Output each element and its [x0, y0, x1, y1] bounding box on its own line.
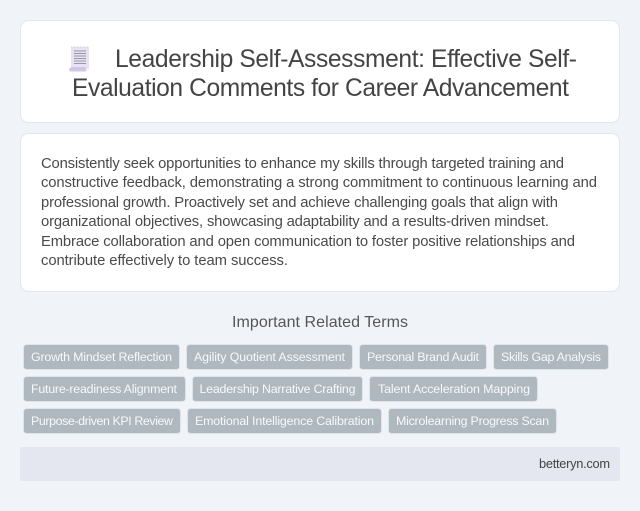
footer: betteryn.com	[539, 456, 610, 471]
panel: related terms chips	[24, 344, 608, 434]
chip: growth mindset	[24, 344, 180, 370]
chip: microlearning	[388, 408, 556, 434]
chip: personal brand: Personal Brand Audit	[367, 350, 480, 364]
chip: agility quotient	[186, 344, 352, 370]
panel: summary card	[20, 134, 620, 292]
summary text: organizational objectives, showcasing adaptability and a results-driven mindset.	[41, 214, 549, 230]
chip: personal brand	[360, 344, 486, 370]
summary text: constructive feedback, demonstrating a strong commitment to continuous learning and	[41, 175, 597, 191]
chip: leadership narrative: Leadership Narrative Crafting	[200, 382, 356, 396]
chip: emotional intelligence	[188, 408, 382, 434]
chip: purpose-driven: Purpose-driven KPI Review	[31, 414, 173, 428]
summary text	[41, 156, 597, 269]
chip: future-readiness	[24, 376, 186, 402]
chip: leadership narrative	[192, 376, 362, 402]
chip: skills gap: Skills Gap Analysis	[501, 350, 601, 364]
title text: Leadership Self-Assessment: Effective Self-	[115, 46, 577, 73]
footer	[20, 447, 620, 481]
summary text: Embrace collaboration and open communication to foster positive relationships and	[41, 234, 575, 250]
chip: purpose-driven	[24, 408, 180, 434]
chip: skills gap	[494, 344, 608, 370]
panel: title card	[20, 20, 620, 122]
chip: microlearning: Microlearning Progress Scan	[396, 414, 549, 428]
heading: related terms: Important Related Terms	[232, 314, 408, 331]
chip: growth mindset: Growth Mindset Reflection	[31, 350, 172, 364]
chip: emotional intelligence: Emotional Intelligence Calibration	[195, 414, 374, 428]
chip: talent acceleration: Talent Acceleration Mapping	[378, 382, 530, 396]
chip: talent acceleration	[370, 376, 538, 402]
summary text: Consistently seek opportunities to enhance my skills through targeted training and	[41, 156, 564, 172]
title text	[72, 46, 577, 102]
chip: agility quotient: Agility Quotient Assessment	[194, 350, 346, 364]
chip: future-readiness: Future-readiness Alignment	[31, 382, 178, 396]
summary text: contribute effectively to team success.	[41, 253, 288, 269]
summary text: professional growth. Proactively set and achieve challenging goals that align with	[41, 195, 558, 211]
title text: Evaluation Comments for Career Advancement	[72, 75, 569, 102]
icon: document scroll	[69, 47, 89, 72]
